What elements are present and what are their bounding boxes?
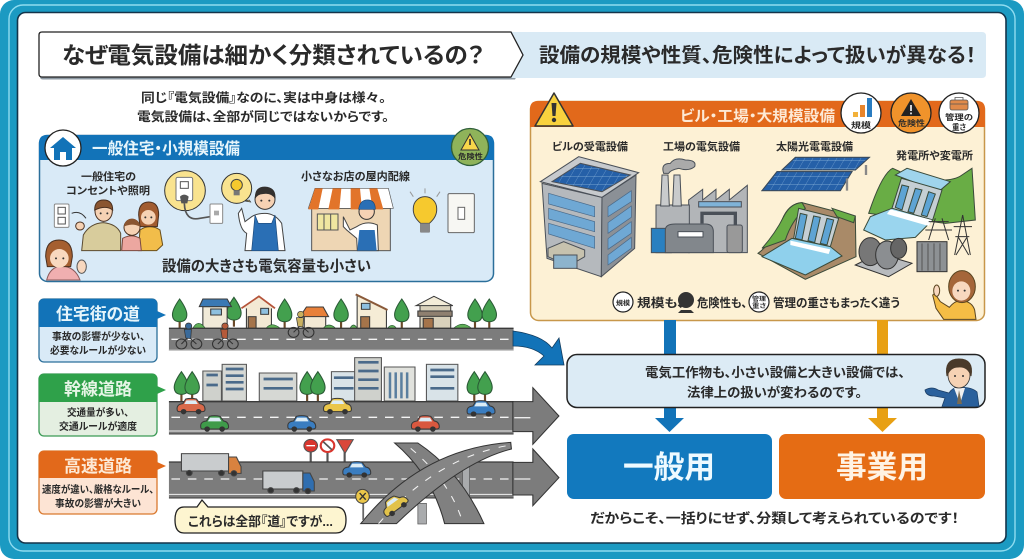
panel caption: 規模も、 (637, 295, 684, 310)
label: arterial road: 幹線道路 (64, 380, 132, 399)
illustration: overpass (361, 442, 511, 524)
illustration: dam front (758, 203, 856, 279)
panel header (530, 101, 985, 127)
icon: warning triangle (535, 93, 573, 126)
illustration: factory (651, 159, 747, 253)
box: business use: 事業用 (836, 450, 928, 485)
box: general use: 一般用 (623, 450, 715, 485)
illustration: pointing woman (933, 271, 976, 319)
label: small shop wiring: 小さなお店の屋内配線 (301, 169, 410, 183)
panel heading: 一般住宅・小規模設備 (92, 139, 240, 158)
icon: risk badge: 危険性 (458, 151, 484, 161)
arrow: blue curve (513, 331, 564, 365)
illustration: bulb and switch (410, 188, 474, 233)
panel caption: 重さ (752, 302, 767, 310)
panel header (39, 135, 494, 160)
intro text (137, 90, 389, 124)
label: residential street (39, 299, 166, 362)
label: building: ビルの受電設備 (552, 140, 629, 153)
big arrows (513, 388, 559, 506)
label: expressway (39, 451, 166, 514)
road: expressway (169, 439, 514, 524)
icon: danger badge: 危険性 (898, 118, 925, 128)
illustration: family and appliances (46, 171, 474, 280)
label: expressway: 事故の影響が大きい (55, 497, 141, 510)
illustration: presenter (925, 359, 979, 406)
road comparison (169, 294, 564, 524)
illustration: worker (238, 187, 285, 251)
box: business use (779, 434, 985, 499)
road: arterial (169, 358, 514, 434)
label: outlets and lights: コンセントや照明 (66, 185, 150, 197)
panel caption: 危険性も、 (697, 295, 747, 310)
panel: large-scale equipment (530, 93, 985, 320)
arrow: orange to business (868, 320, 897, 432)
callout: legal treatment: 電気工作物も、小さい設備と大きい設備では、 (645, 365, 905, 380)
main heading: なぜ電気設備は細かく分類されているの？ (62, 42, 484, 68)
panel heading: ビル・工場・大規模設備 (680, 107, 835, 125)
icon: danger badge (891, 93, 931, 133)
sub heading: 設備の規模や性質、危険性によって扱いが異なる！ (539, 43, 976, 67)
label: residential street: 必要なルールが少ない (50, 344, 146, 357)
illustration: dam back (864, 168, 975, 240)
panel caption: 管理の重さもまったく違う (773, 295, 900, 310)
icon: risk badge (452, 128, 488, 166)
label: outlets and lights: 一般住宅の (81, 170, 136, 183)
icon: management badge: 管理の (945, 112, 973, 122)
icon: scale badge (841, 93, 881, 133)
label: factory: 工場の電気設備 (663, 140, 741, 153)
illustration: office building (540, 157, 639, 277)
label: expressway: 速度が違い、厳格なルール、 (42, 483, 154, 496)
icon: management badge: 重さ (952, 122, 966, 132)
icon: scale badge: 規模 (851, 120, 871, 130)
callout: legal treatment: 法律上の扱いが変わるのです。 (687, 385, 862, 400)
icon: house (45, 130, 81, 166)
label: power plant: 発電所や変電所 (896, 149, 974, 162)
callout: all are roads (175, 500, 346, 533)
title banner (39, 32, 986, 80)
illustration: outlet bubble (165, 171, 223, 223)
callout: all are roads: これらは全部『道』ですが... (188, 514, 333, 529)
conclusion text: だからこそ、一括りにせず、分類して考えられているのです！ (590, 510, 959, 526)
panel caption: 規模 (616, 298, 631, 307)
label: solar: 太陽光電電設備 (776, 140, 854, 153)
road: residential (169, 294, 514, 351)
panel caption: 設備の大きさも電気容量も小さい (162, 257, 371, 275)
illustration: trucks (181, 454, 314, 494)
illustration: bulb bubble (222, 173, 252, 203)
panel caption: 管理 (752, 295, 766, 303)
label: residential street: 住宅街の道 (56, 305, 140, 324)
box: general use (567, 434, 772, 499)
illustration: large equipment (540, 157, 976, 319)
intro text: 同じ『電気設備』なのに、実は中身は様々。 (141, 90, 386, 105)
icon: management badge (939, 93, 979, 133)
label: arterial road (39, 374, 166, 436)
label: expressway: 高速道路 (64, 456, 132, 476)
panel caption (613, 292, 900, 313)
label: arterial road: 交通量が多い、 (67, 406, 129, 419)
illustration: generators and transformer (855, 215, 972, 277)
intro text: 電気設備は、全部が同じではないからです。 (137, 109, 389, 124)
callout: legal treatment (567, 354, 985, 408)
arrow: blue to general (655, 320, 684, 432)
illustration: shop (308, 188, 393, 251)
label: residential street: 事故の影響が少ない、 (52, 330, 145, 343)
panel: small-scale equipment (39, 128, 494, 282)
label: arterial road: 交通ルールが適度 (59, 420, 137, 433)
illustration: solar panels (762, 157, 869, 191)
icon: crossing sign (356, 489, 369, 520)
label: outlets and lights (66, 170, 150, 197)
